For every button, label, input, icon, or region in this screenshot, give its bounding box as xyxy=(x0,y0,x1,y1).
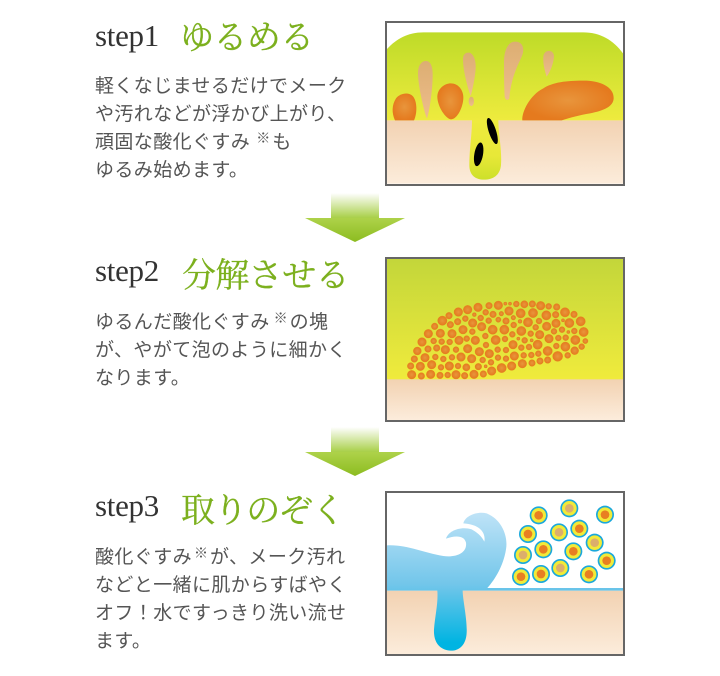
step 1 text: ゆるみ始めます。 xyxy=(95,160,248,181)
step 1 text: 軽くなじませるだけでメーク xyxy=(95,76,347,97)
step 2 label: step2 xyxy=(95,253,159,288)
frame xyxy=(386,22,624,185)
step 3 heading: 取りのぞく xyxy=(181,493,344,530)
frame xyxy=(386,492,624,655)
step 3 text: などと一緒に肌からすばやく xyxy=(95,575,347,596)
step 3 illustration xyxy=(385,491,625,656)
orange blobs xyxy=(393,81,614,120)
step 3 text: 酸化ぐすみ※が、メーク汚れ xyxy=(95,545,345,568)
arrow 2 xyxy=(305,428,405,476)
step 1 text: や汚れなどが浮かび上がり、 xyxy=(95,104,346,125)
step 1 text xyxy=(95,76,347,181)
skin xyxy=(387,120,623,184)
rising drops xyxy=(418,42,554,118)
step 1 illustration xyxy=(385,21,625,186)
arrow 1 xyxy=(305,194,405,242)
step 2 section xyxy=(95,253,349,389)
step 2 text: なります。 xyxy=(95,368,190,389)
green background xyxy=(387,259,623,380)
step 2 text xyxy=(95,310,347,389)
bubble cluster xyxy=(407,301,588,379)
step 3 text: オフ！水ですっきり洗い流せ xyxy=(95,603,346,624)
step 1 text: 頑固な酸化ぐすみ ※も xyxy=(95,130,292,153)
step 1 heading: ゆるめる xyxy=(180,20,314,57)
dirt in pore xyxy=(472,117,500,167)
skin xyxy=(387,379,623,420)
water wave xyxy=(387,513,623,651)
step 2 heading: 分解させる xyxy=(182,258,349,295)
step 3 text xyxy=(95,545,347,652)
step 2 illustration xyxy=(385,257,625,422)
step 1 section xyxy=(95,18,625,186)
step 3 text: ます。 xyxy=(95,631,151,652)
green film xyxy=(387,32,623,120)
frame xyxy=(386,258,624,421)
step 3 section xyxy=(95,488,347,652)
step 1 label: step1 xyxy=(95,18,159,53)
skin xyxy=(387,591,623,654)
step 3 label: step3 xyxy=(95,488,159,523)
step 2 text: が、やがて泡のように細かく xyxy=(95,340,347,361)
step 2 text: ゆるんだ酸化ぐすみ ※の塊 xyxy=(95,310,328,333)
floating particles xyxy=(512,499,616,586)
pore xyxy=(469,120,501,180)
